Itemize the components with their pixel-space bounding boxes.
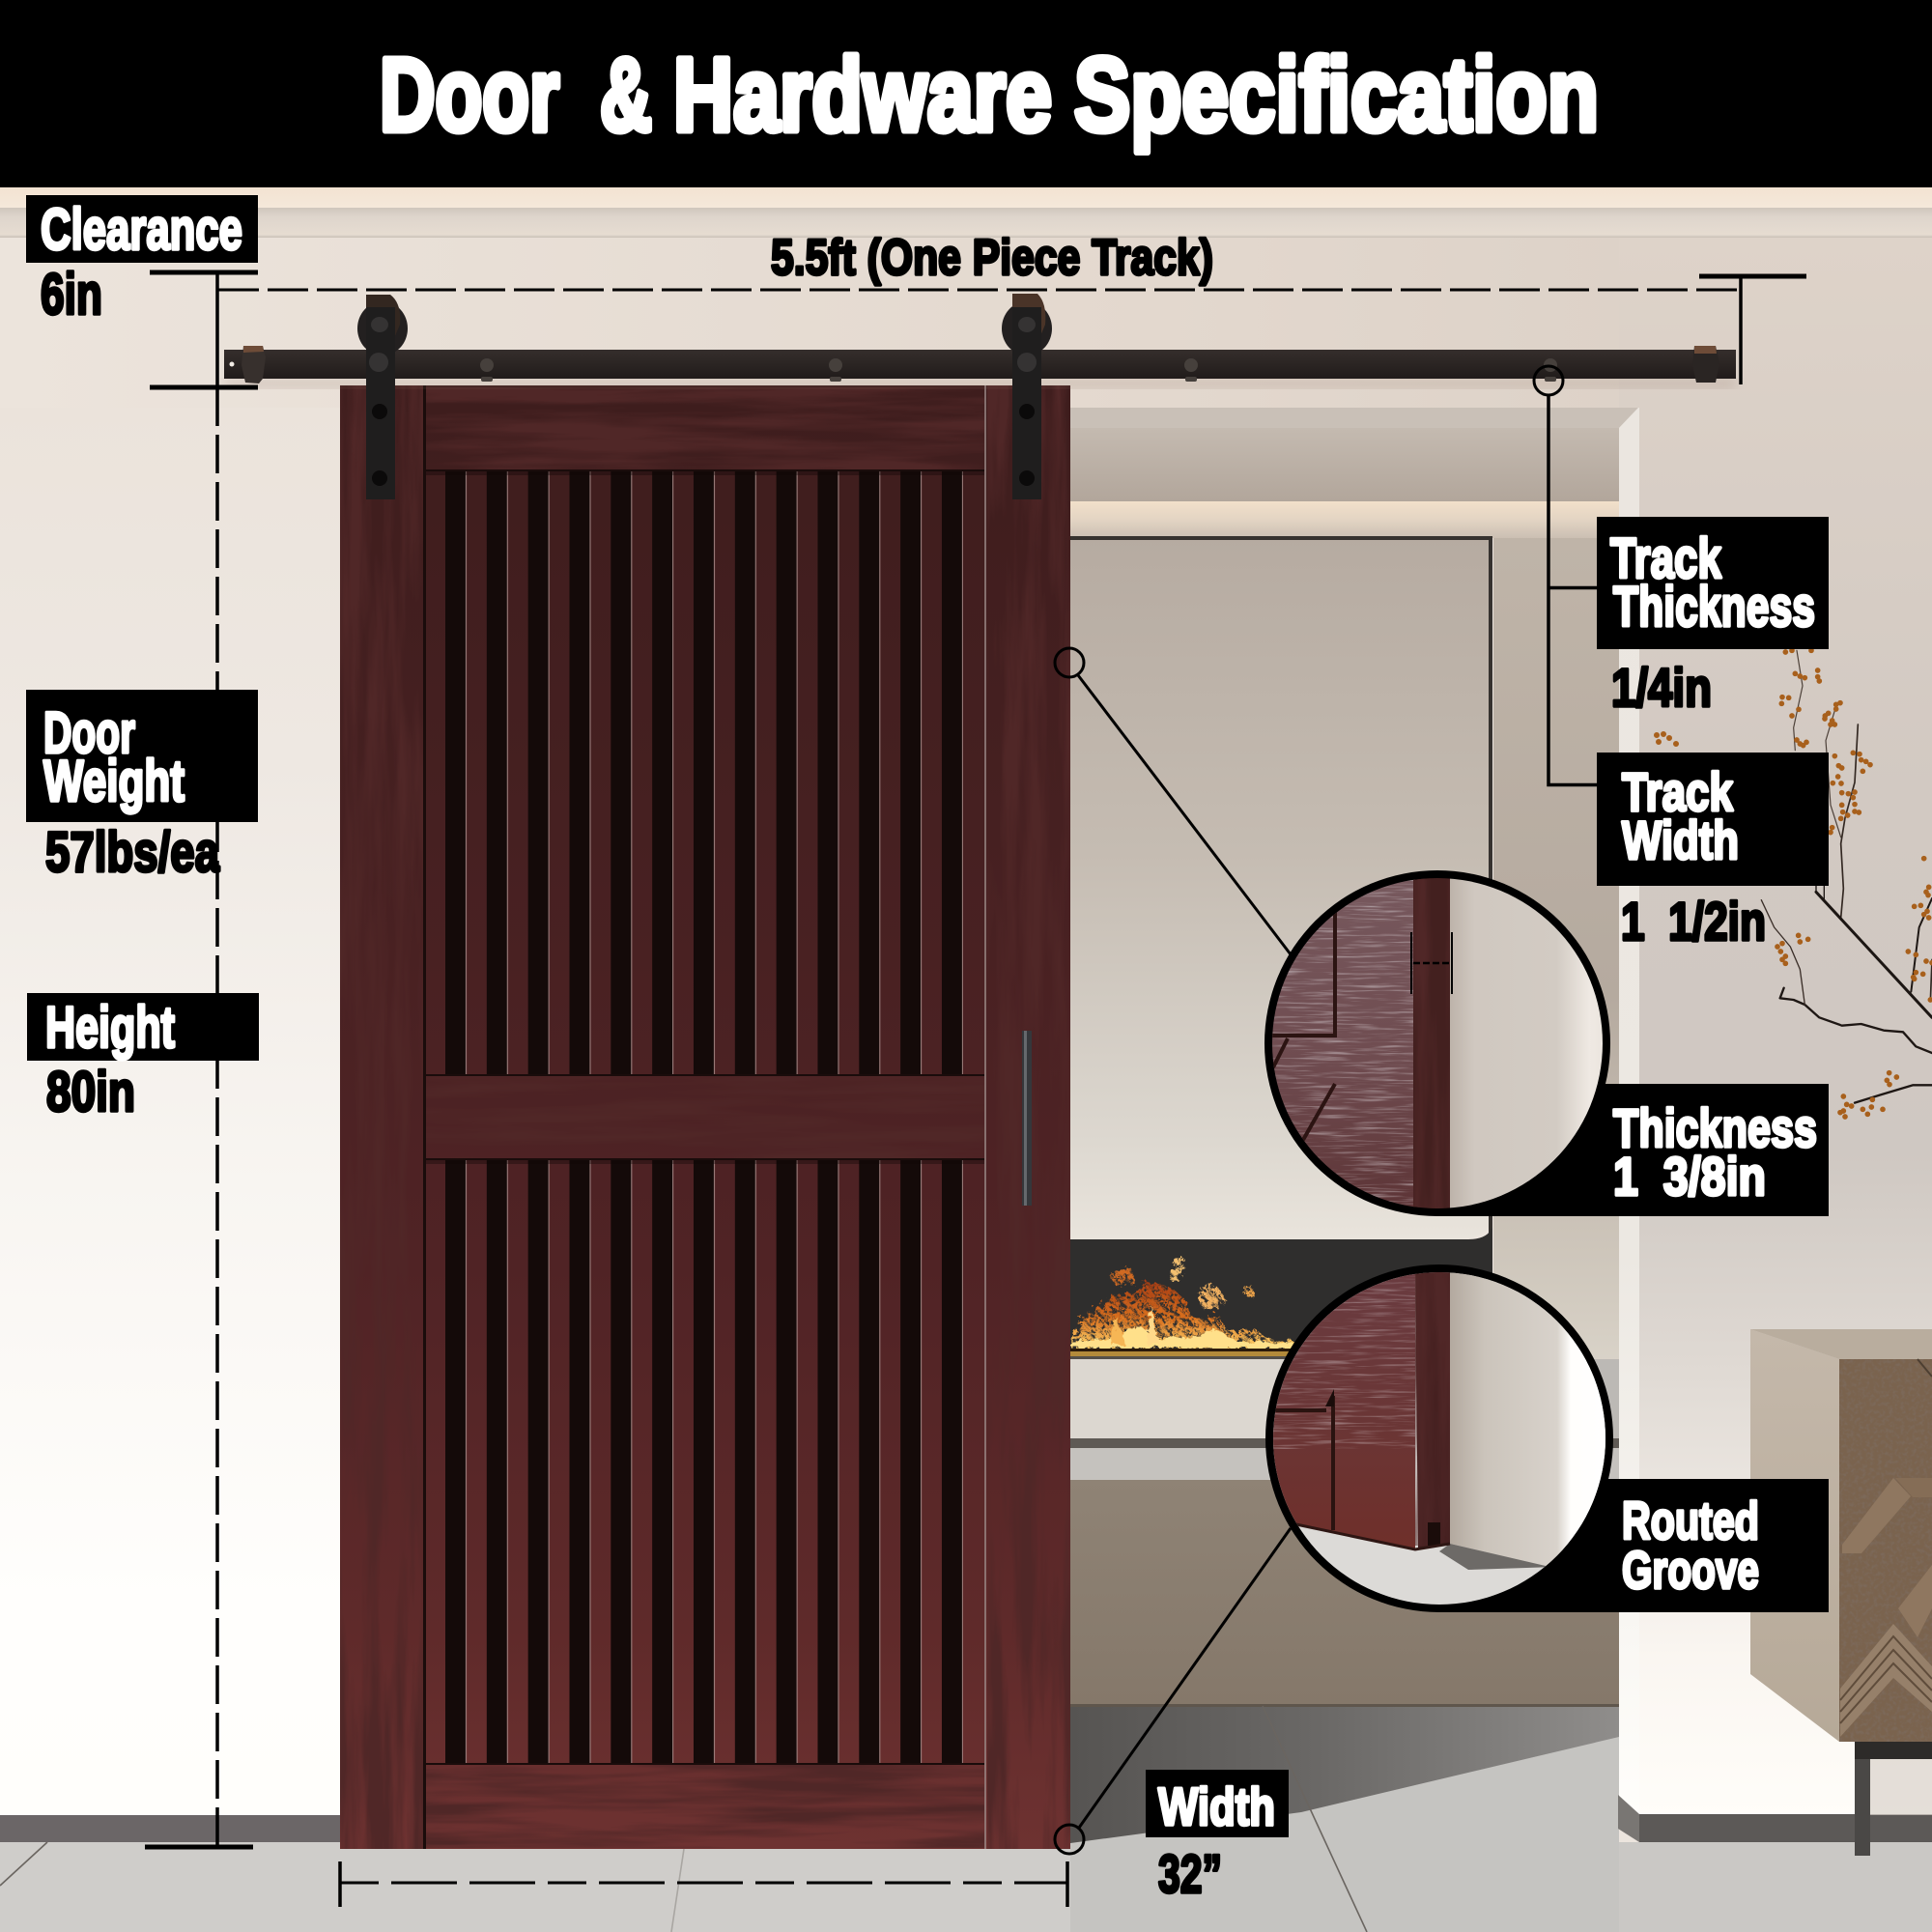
value: track width: 1 1/2in xyxy=(1621,891,1766,952)
detail circle: door thickness xyxy=(1256,869,1614,1217)
title: & xyxy=(600,36,652,153)
cabinet front xyxy=(1839,1359,1932,1742)
left hanger xyxy=(357,295,408,499)
label: track width: Width xyxy=(1622,810,1739,870)
leader lines: track callouts xyxy=(1534,366,1597,784)
value: door weight: 57lbs/ea xyxy=(45,821,220,884)
fireplace flames xyxy=(1070,1258,1495,1359)
cabinet top xyxy=(1750,1329,1932,1359)
barn door xyxy=(340,385,1070,1849)
title: Hardware xyxy=(673,36,1052,153)
text: routed groove xyxy=(1622,1491,1759,1600)
label: track thickness: Thickness xyxy=(1613,576,1815,639)
wood grain stiles xyxy=(340,385,1070,1849)
value: width: 32” xyxy=(1158,1843,1222,1904)
plant branches and berries xyxy=(1657,650,1932,1117)
interior back wall right of frame xyxy=(1493,538,1619,1456)
left wall xyxy=(0,238,348,1816)
detail circle: routed groove xyxy=(1265,1264,1613,1612)
floor tile joints xyxy=(0,1706,1367,1932)
lower left wall xyxy=(0,408,348,1816)
door pull handle xyxy=(1022,1031,1032,1206)
leader: routed groove xyxy=(1055,1528,1291,1854)
door frame line xyxy=(1070,538,1491,1275)
dimension: clearance and height xyxy=(145,272,258,1847)
label box: routed groove xyxy=(1439,1479,1829,1612)
cabinet legs xyxy=(1855,1742,1932,1856)
track end stops xyxy=(242,346,1719,384)
label: track width: Track xyxy=(1622,761,1734,822)
label: track thickness xyxy=(1597,517,1829,649)
label: width: Width xyxy=(1158,1776,1275,1836)
bottom rail xyxy=(426,1764,984,1848)
value: clearance 6in: 6in xyxy=(41,262,102,327)
label: track width xyxy=(1597,753,1829,886)
right floor and left floor xyxy=(0,1842,1932,1932)
upper wall above opening xyxy=(0,238,1932,408)
dimension: track length xyxy=(218,276,1806,384)
text: routed groove: Routed xyxy=(1622,1491,1759,1550)
top rail xyxy=(426,387,984,469)
title: Specification xyxy=(1074,36,1599,153)
stile grooves xyxy=(425,385,985,1849)
fireplace concrete base xyxy=(1070,1359,1619,1480)
right wall xyxy=(1619,238,1932,1816)
title xyxy=(380,36,1599,153)
value: track thickness: 1/4in xyxy=(1611,657,1712,718)
cabinet side panel xyxy=(1750,1329,1839,1742)
track wall bolts xyxy=(480,358,1557,382)
text: door thickness xyxy=(1613,1097,1817,1207)
sliding track xyxy=(224,346,1736,388)
slats upper section xyxy=(426,470,984,1075)
opening soffit xyxy=(1070,408,1638,538)
text: door thickness: 1 3/8in xyxy=(1613,1146,1766,1207)
text: routed groove: Groove xyxy=(1622,1540,1759,1600)
right hanger xyxy=(1002,294,1052,499)
interior panel xyxy=(1070,538,1491,1239)
sideboard cabinet xyxy=(1750,1329,1932,1856)
baseboards xyxy=(0,1795,1932,1842)
slats lower section xyxy=(426,1159,984,1764)
label box: thickness xyxy=(1437,1084,1829,1216)
dimension: door width xyxy=(340,1861,1067,1907)
interior rug xyxy=(1070,1480,1619,1706)
label: door weight: Weight xyxy=(43,749,185,813)
middle rail xyxy=(426,1075,984,1159)
interior floor xyxy=(1070,1704,1619,1932)
label: track length: 5.5ft (One Piece Track) xyxy=(771,230,1213,286)
label: door weight xyxy=(26,690,258,822)
leader: door thickness xyxy=(1055,648,1291,954)
title bar xyxy=(0,0,1932,187)
value: height: 80in xyxy=(46,1061,135,1123)
fireplace recess xyxy=(1070,1227,1492,1353)
label: height: Height xyxy=(45,995,175,1060)
title: Door xyxy=(380,36,559,153)
text: door thickness: Thickness xyxy=(1613,1097,1817,1158)
label: door weight: Door xyxy=(43,700,135,765)
thickness measure marks xyxy=(1411,932,1452,994)
label: clearance: Clearance xyxy=(41,197,242,262)
jamb xyxy=(1619,408,1639,1816)
crown moulding xyxy=(0,187,1932,238)
label: track thickness: Track xyxy=(1610,527,1722,590)
